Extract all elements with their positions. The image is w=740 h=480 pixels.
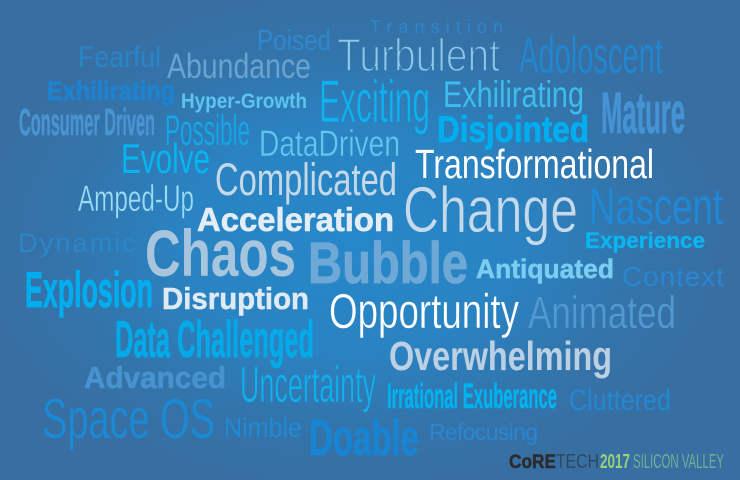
word: Doable: Doable (309, 409, 419, 466)
word: Complicated: Complicated (215, 154, 397, 205)
word: Experience: Experience (585, 228, 705, 253)
word: Evolve: Evolve (121, 135, 210, 182)
word: Transformational: Transformational (415, 141, 654, 187)
word cloud infographic: Consumer Driven (19, 102, 155, 144)
word: Hyper-Growth: Hyper-Growth (181, 90, 307, 113)
word: Dynamic: Dynamic (18, 228, 136, 258)
word: Disruption: Disruption (162, 281, 309, 316)
word: Chaos: Chaos (145, 216, 296, 290)
word: Overwhelming: Overwhelming (389, 333, 612, 379)
word: Exhilirating (light): Exhilirating (443, 74, 584, 115)
word: Transition: Transition (370, 17, 503, 37)
word: Bubble: Bubble (308, 231, 468, 296)
word: Turbulent: Turbulent (337, 29, 500, 81)
word: Abundance: Abundance (167, 47, 311, 86)
word: Exhilirating (dark): Exhilirating (47, 76, 175, 106)
word: Animated: Animated (528, 287, 676, 338)
logo: CoRETech 2017 Silicon Valley (509, 451, 724, 473)
word: Space OS: Space OS (42, 387, 215, 451)
word cloud infographic: Data Challenged (115, 311, 314, 369)
word: Nimble: Nimble (224, 412, 302, 443)
logo: CoRETech 2017 Silicon Valley: CoRE (509, 452, 556, 473)
word: Advanced: Advanced (84, 360, 226, 395)
word: Cluttered: Cluttered (569, 384, 671, 417)
word: Exciting: Exciting (319, 68, 430, 135)
word: Fearful: Fearful (78, 41, 161, 74)
logo: CoRETech 2017 Silicon Valley: 2017 (600, 451, 630, 473)
word: Opportunity: Opportunity (329, 285, 519, 339)
word: Possible: Possible (165, 106, 250, 155)
word: Disjointed: Disjointed (437, 109, 589, 150)
word: Change: Change (403, 173, 578, 246)
word: Poised: Poised (257, 25, 331, 57)
word: Amped-Up: Amped-Up (78, 178, 194, 219)
word: Uncertainty: Uncertainty (240, 356, 376, 413)
word cloud infographic: Irrational Exuberance (387, 377, 557, 416)
word: Acceleration: Acceleration (197, 201, 394, 238)
logo: CoRETech 2017 Silicon Valley: TECH (556, 451, 599, 473)
word: Refocusing: Refocusing (429, 419, 538, 445)
word: Antiquated: Antiquated (476, 254, 614, 284)
word: DataDriven: DataDriven (259, 123, 400, 164)
word: Context: Context (622, 261, 724, 292)
word: Explosion: Explosion (25, 262, 153, 318)
